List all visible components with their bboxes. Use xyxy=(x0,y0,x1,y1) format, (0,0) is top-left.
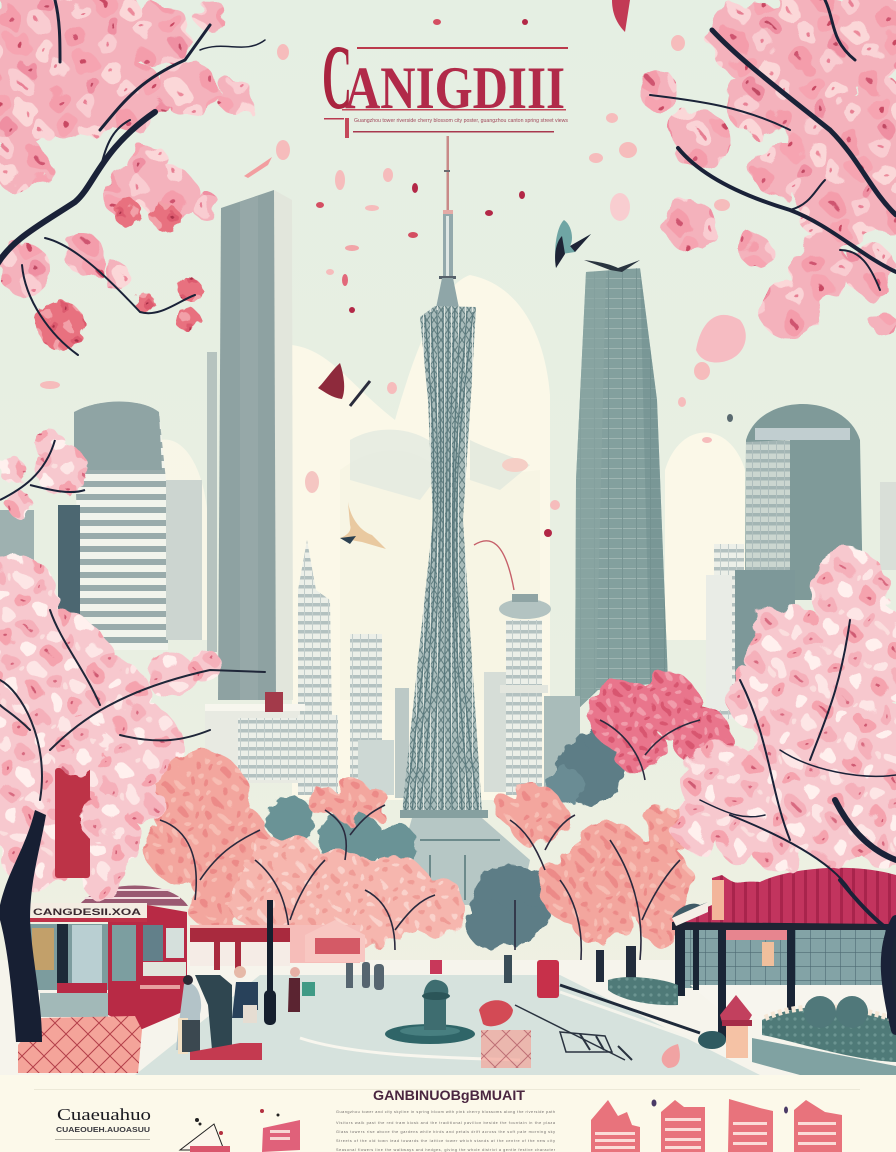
footer left logo: Cuaeuahuo xyxy=(57,1105,151,1124)
red tram kiosk: CANGDESII.XOA xyxy=(33,907,141,918)
title block: C xyxy=(322,26,352,128)
right round tower xyxy=(745,404,896,600)
blossoms over pillar xyxy=(48,715,129,844)
lower left cherry tree xyxy=(0,555,265,1042)
title subtitle: Guangzhou tower riverside cherry blossom city poster, guangzhou canton spring street views xyxy=(354,118,568,124)
fountain xyxy=(385,980,475,1044)
deep blossoms xyxy=(36,198,202,349)
cream clouds behind tower xyxy=(160,275,745,800)
tower lattice body xyxy=(402,306,482,812)
small drop icons xyxy=(652,1100,788,1114)
left tall slab tower xyxy=(218,190,293,700)
blossoms xyxy=(672,550,896,873)
thin pole building xyxy=(207,352,217,652)
net planter box xyxy=(481,1030,531,1068)
footer strip xyxy=(0,1075,896,1152)
footer paragraph: Seasonal flowers line the walkways and hedges, giving the whole district a gentle festive character xyxy=(336,1148,556,1152)
bird red xyxy=(318,363,370,406)
trunk and boughs xyxy=(700,620,896,1030)
footer heading: GANBINUOBgBMUAIT xyxy=(373,1088,526,1103)
footer paragraph: Streets of the old town lead towards the lattice tower which stands at the centre of the new city xyxy=(336,1139,555,1143)
people group xyxy=(176,966,315,1060)
kiosk steps xyxy=(40,993,108,1017)
right lower white block xyxy=(706,544,795,720)
red pillar xyxy=(55,768,90,878)
footer card 3 xyxy=(728,1099,773,1152)
light pink row trees xyxy=(230,833,465,951)
snow yard xyxy=(690,985,896,1025)
footer icon sail xyxy=(180,1118,230,1152)
footer paragraph: Guangzhou tower and city skyline in spring bloom with pink cherry blossoms along the riverside path xyxy=(336,1110,555,1114)
net fence xyxy=(18,1016,142,1073)
pavilion wall and glass xyxy=(676,928,896,988)
falling petals xyxy=(40,0,733,537)
tower base plinth xyxy=(400,810,530,905)
blossoms xyxy=(0,0,253,296)
red post box xyxy=(537,960,559,998)
low striped building xyxy=(205,692,338,795)
branches xyxy=(650,0,896,290)
footer card 4 xyxy=(794,1100,842,1152)
tower lattice ribs xyxy=(405,308,478,810)
plaza ground xyxy=(0,960,896,1075)
red lantern post xyxy=(720,995,752,1058)
lower street figures and furniture xyxy=(18,886,680,1073)
red tram kiosk xyxy=(27,886,188,1030)
title top rule xyxy=(357,47,568,49)
small left branch blossoms xyxy=(0,430,88,518)
street lamp xyxy=(264,900,276,1025)
lantern base pool xyxy=(698,1031,726,1049)
bird cream xyxy=(340,502,386,549)
bird on right tower roof xyxy=(584,260,640,272)
ground marking xyxy=(560,1032,632,1060)
kerb wall xyxy=(752,1038,896,1075)
top right cherry tree xyxy=(640,0,896,362)
teal trees xyxy=(266,721,634,949)
trunk xyxy=(0,810,46,1042)
footer icon red box xyxy=(260,1109,300,1152)
salmon trees xyxy=(145,750,694,945)
distant bollards xyxy=(346,946,636,990)
blossoms xyxy=(0,555,221,902)
footer paragraph xyxy=(336,1110,556,1152)
midground trees xyxy=(145,673,730,970)
midground towers xyxy=(298,540,580,798)
pink drop xyxy=(662,1044,680,1068)
hedge strip left xyxy=(608,977,678,1005)
birds xyxy=(318,220,640,549)
footer card 2 xyxy=(661,1100,705,1152)
hedge strip right xyxy=(762,996,896,1062)
small red pavilion xyxy=(190,920,365,974)
red planter ball xyxy=(479,1000,513,1026)
title underline xyxy=(342,109,566,110)
pavilion pillars xyxy=(675,930,896,1040)
deep pink tree xyxy=(589,673,730,776)
branches xyxy=(0,610,265,800)
left round striped tower xyxy=(0,402,202,650)
title lower rule xyxy=(353,131,554,132)
skyline buildings xyxy=(0,190,896,798)
top left cherry tree xyxy=(0,0,265,355)
pavilion roof xyxy=(672,868,896,924)
branches xyxy=(0,0,265,355)
lower right cherry tree xyxy=(672,550,896,1030)
blossoms xyxy=(640,0,896,340)
title block xyxy=(322,26,568,138)
title word: ANIGDIII xyxy=(345,55,565,121)
footer left logo: CUAEOUEH.AUOASUU xyxy=(56,1125,150,1134)
tower spire xyxy=(436,136,459,308)
small observation tower xyxy=(474,541,551,795)
footer left logo xyxy=(55,1105,151,1140)
footer paragraph: Glass towers rise above the gardens while birds and petals drift across the soft pale morning sky xyxy=(336,1130,555,1134)
bird teal xyxy=(555,220,591,268)
footer paragraph: Visitors walk past the red tram kiosk and the traditional pavilion beside the fountain in the plaza xyxy=(336,1121,556,1125)
Canton Tower xyxy=(400,136,530,905)
tree branches xyxy=(160,720,700,970)
right tall tower xyxy=(575,268,668,712)
loose pink blossom xyxy=(696,315,746,362)
footer card 1 xyxy=(591,1100,640,1152)
pavilion on right xyxy=(608,868,896,1075)
